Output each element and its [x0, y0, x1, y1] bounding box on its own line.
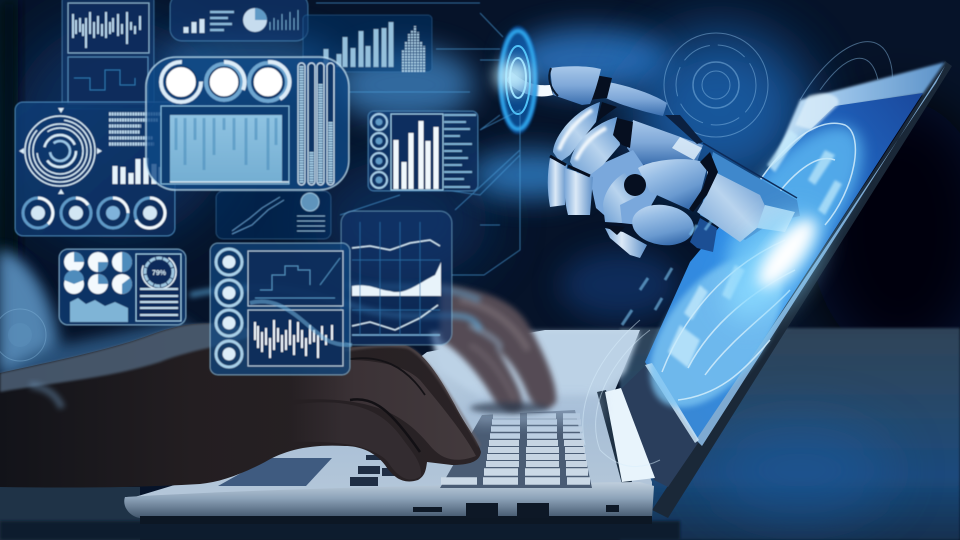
display — [645, 93, 923, 441]
panel: candlestick chart top left — [62, 0, 154, 109]
lower dark wedge — [620, 366, 698, 487]
panel: bar chart top right — [303, 15, 432, 72]
blurred sleeve with target ring — [0, 250, 200, 385]
top bezel — [770, 62, 945, 170]
index distal — [550, 66, 601, 105]
gauges — [23, 198, 165, 228]
laptop base — [124, 330, 655, 524]
laptop screen — [620, 61, 952, 518]
panel: left radar dashboard — [15, 102, 175, 236]
screen glow — [709, 201, 835, 335]
panel: area charts stack — [341, 211, 452, 345]
forearm — [697, 168, 766, 242]
ring proximal — [570, 117, 620, 175]
front edge — [124, 482, 654, 518]
connector — [690, 218, 717, 252]
hologram rings: right — [664, 33, 892, 195]
black joint middle — [597, 102, 617, 122]
white dials — [161, 62, 290, 102]
hologram ellipse — [624, 233, 808, 431]
upper hand (blurred) — [440, 283, 556, 414]
table surface — [0, 328, 960, 540]
circuit lines — [316, 3, 520, 275]
ring lower — [564, 168, 593, 215]
hinge — [597, 390, 632, 484]
back of hand — [627, 120, 703, 165]
gauge: 79% — [152, 270, 167, 277]
radar rings — [25, 116, 95, 186]
touchpad — [218, 458, 332, 486]
black joint index — [588, 75, 612, 100]
robot hand — [506, 66, 800, 258]
touch target rings — [495, 26, 538, 134]
forearm sleeve — [700, 152, 800, 240]
panel: pies and 79 percent gauge — [59, 249, 186, 325]
pinky mid — [603, 173, 640, 223]
holographic dashboards — [15, 0, 520, 375]
level meters — [298, 63, 334, 185]
dark strip — [665, 115, 703, 144]
bright right strip — [696, 66, 945, 446]
screen sparkle streaks — [622, 220, 712, 325]
palm underside — [588, 150, 660, 225]
panel: top dashboard with pie — [170, 0, 308, 41]
thumb — [630, 201, 696, 249]
middle proximal — [553, 102, 600, 162]
last segment — [605, 228, 647, 258]
pie chart — [243, 8, 267, 32]
finger shading — [290, 360, 476, 460]
index proximal — [606, 82, 667, 116]
outer dark edge — [652, 61, 952, 518]
panel: right bars dashboard — [368, 111, 478, 191]
faint arcs over hinge — [583, 320, 660, 467]
big knuckle — [638, 159, 707, 210]
area chart — [161, 106, 289, 184]
middle lower — [548, 158, 567, 207]
side ports — [413, 503, 619, 518]
fingertip — [506, 72, 553, 97]
panel: central dashboard — [146, 57, 349, 190]
keyboard — [350, 395, 600, 488]
lower hand — [0, 323, 481, 488]
panel: gauges and candlesticks — [210, 243, 352, 375]
black joint ring — [613, 118, 633, 148]
panel: small line chart — [216, 191, 331, 239]
black arc — [689, 152, 718, 212]
blue data stream — [190, 285, 480, 330]
